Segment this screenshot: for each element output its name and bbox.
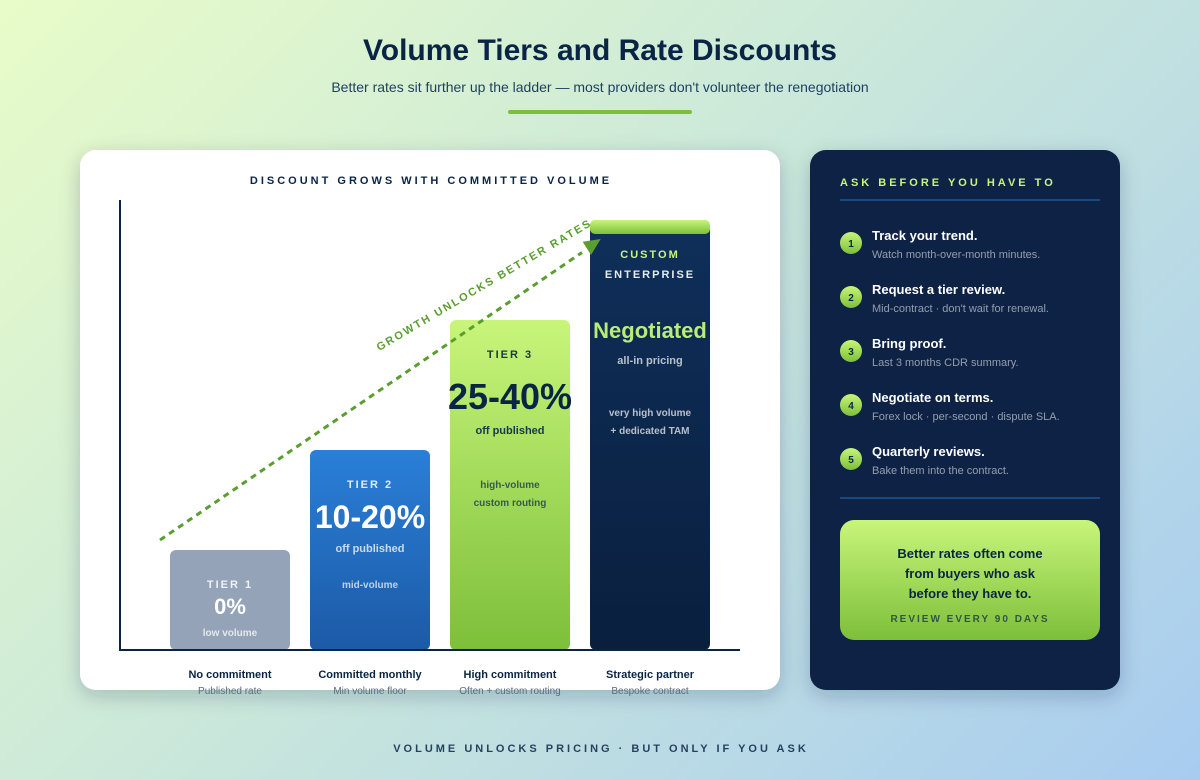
bar: tier 2: off published — [335, 543, 405, 555]
step 3: Bring proof. — [872, 336, 946, 351]
callout: before they have to. — [909, 586, 1031, 601]
step 3 — [840, 336, 1019, 369]
bar: tier 3 — [448, 320, 572, 650]
step 4: Negotiate on terms. — [872, 390, 993, 405]
chart axes — [120, 200, 740, 650]
step 1: Watch month-over-month minutes. — [872, 249, 1040, 261]
panel: ask before you have to — [810, 150, 1120, 690]
axis label: committed monthly: Min volume floor — [333, 686, 407, 697]
axis label: committed monthly: Committed monthly — [318, 669, 423, 681]
footer: VOLUME UNLOCKS PRICING · BUT ONLY IF YOU ASK — [393, 743, 809, 755]
step 3: 3 — [848, 347, 854, 358]
step 4: 4 — [848, 401, 854, 412]
step 1: Track your trend. — [872, 228, 977, 243]
bar: tier 3: off published — [475, 425, 545, 437]
axis label: strategic partner: Strategic partner — [606, 669, 695, 681]
axis label: committed monthly — [318, 669, 423, 697]
step 4 — [840, 390, 1060, 423]
step 4: Forex lock · per-second · dispute SLA. — [872, 411, 1060, 423]
step 2: Mid-contract · don't wait for renewal. — [872, 303, 1049, 315]
side panel heading: ASK BEFORE YOU HAVE TO — [840, 177, 1056, 189]
bar: custom enterprise — [590, 220, 710, 650]
bar: tier 3: custom routing — [474, 498, 546, 509]
chart heading: DISCOUNT GROWS WITH COMMITTED VOLUME — [250, 175, 612, 187]
bar: tier 2: TIER 2 — [347, 479, 393, 491]
bar: custom enterprise: CUSTOM — [620, 249, 680, 261]
bar: tier 3: high-volume — [480, 480, 540, 491]
bar: tier 3: 25-40% — [448, 376, 572, 417]
bar: tier 2: mid-volume — [342, 580, 398, 591]
panel: discount chart — [80, 150, 780, 697]
callout — [840, 520, 1100, 640]
step 1: 1 — [848, 239, 854, 250]
title underline — [508, 110, 692, 114]
subtitle: Better rates sit further up the ladder — most providers don't volunteer the renegotiation — [331, 79, 869, 95]
step 5: 5 — [848, 455, 854, 466]
step 2: Request a tier review. — [872, 282, 1005, 297]
bar: custom enterprise: very high volume — [609, 408, 692, 419]
chart panel background — [80, 150, 780, 690]
callout: Better rates often come — [897, 546, 1043, 561]
axis label: no commitment — [188, 669, 272, 697]
bar: tier 1: low volume — [203, 628, 258, 639]
title: Volume Tiers and Rate Discounts — [363, 34, 837, 67]
axis label: strategic partner: Bespoke contract — [611, 686, 689, 697]
axis label: high commitment: Often + custom routing — [459, 686, 561, 697]
bar: custom enterprise: all-in pricing — [617, 355, 683, 367]
axis label: high commitment — [459, 669, 561, 697]
step 5: Quarterly reviews. — [872, 444, 985, 459]
callout: REVIEW EVERY 90 DAYS — [890, 614, 1050, 625]
bar cap — [590, 220, 710, 234]
arrow label: GROWTH UNLOCKS BETTER RATES — [375, 217, 594, 354]
bar: custom enterprise: Negotiated — [593, 318, 707, 343]
step 2: 2 — [848, 293, 854, 304]
step 5: Bake them into the contract. — [872, 465, 1009, 477]
bar: tier 1: TIER 1 — [207, 579, 253, 591]
bar: custom enterprise: + dedicated TAM — [610, 426, 690, 437]
side panel background — [810, 150, 1120, 690]
bar: tier 1: 0% — [214, 594, 246, 619]
bar: tier 2 — [310, 450, 430, 650]
step 1 — [840, 228, 1040, 261]
axis label: strategic partner — [606, 669, 695, 697]
bar: tier 3: TIER 3 — [487, 349, 533, 361]
axis label: no commitment: Published rate — [198, 686, 262, 697]
callout: from buyers who ask — [905, 566, 1036, 581]
axis label: no commitment: No commitment — [188, 669, 272, 681]
step 3: Last 3 months CDR summary. — [872, 357, 1019, 369]
bar: custom enterprise: ENTERPRISE — [605, 269, 695, 281]
arrow: growth trend — [160, 239, 601, 540]
axis label: high commitment: High commitment — [464, 669, 557, 681]
step 2 — [840, 282, 1049, 315]
bar: tier 1 — [170, 550, 290, 650]
bar: tier 2: 10-20% — [315, 499, 425, 535]
step 5 — [840, 444, 1009, 477]
